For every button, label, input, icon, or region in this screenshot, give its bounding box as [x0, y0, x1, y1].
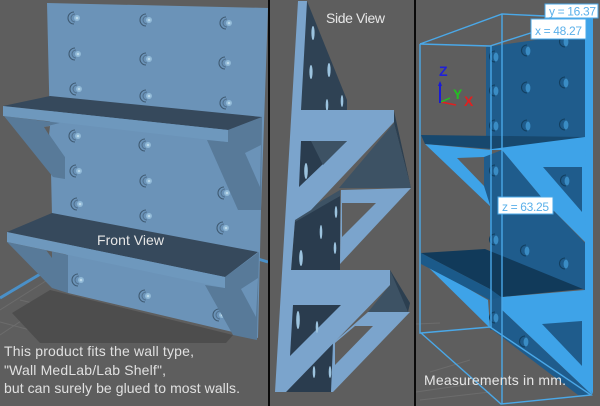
- back wall: [47, 3, 268, 338]
- upper opening: [299, 141, 347, 187]
- main side profile: [275, 1, 394, 392]
- lower left bracket: [7, 242, 68, 293]
- central dark column: [484, 150, 502, 330]
- lower bracket underside: [368, 270, 410, 312]
- floor lines: [416, 323, 500, 400]
- panel dividers: [268, 0, 416, 406]
- dark wall: [486, 33, 585, 137]
- right upright: [585, 17, 593, 395]
- panel: measurements: [416, 4, 598, 404]
- label: side view: Side View: [326, 10, 386, 26]
- upper right bracket: [207, 117, 262, 210]
- floor grid and shadow: [0, 259, 268, 343]
- lower opening: [335, 326, 373, 365]
- rivets: [490, 36, 569, 347]
- lower diagonal wall: [490, 310, 592, 395]
- upper shelf: [3, 96, 262, 142]
- lower shelf: [421, 249, 583, 300]
- middle light strut: [340, 188, 411, 264]
- lower dark wall: [501, 150, 585, 290]
- middle opening: [342, 203, 376, 237]
- dimension label: y: y = 16.37: [549, 4, 596, 18]
- lower strut: [331, 312, 410, 392]
- label: measurements: Measurements in mm.: [424, 372, 566, 388]
- note: wall type: This product fits the wall type,: [4, 343, 194, 359]
- panel: front view: [0, 3, 268, 396]
- dimension label: x: [531, 19, 586, 39]
- lower left bracket: [425, 264, 490, 328]
- axis gizmo: [438, 63, 474, 109]
- rivets: [68, 12, 232, 321]
- upper left bracket: [4, 116, 65, 179]
- axis gizmo: Z: [439, 63, 448, 79]
- note: wall type: [4, 343, 240, 396]
- lower opening in profile: [290, 305, 341, 356]
- label: front view: Front View: [97, 232, 165, 248]
- lower right bracket: [502, 290, 592, 395]
- panel: side view: [275, 1, 411, 392]
- upper shelf: [421, 135, 585, 149]
- dimension label: x: x = 48.27: [535, 24, 582, 38]
- axis gizmo: X: [464, 93, 474, 109]
- axis gizmo: Y: [453, 86, 463, 102]
- upper bracket underside: [339, 111, 411, 188]
- note: wall type: "Wall MedLab/Lab Shelf",: [4, 362, 166, 378]
- note: wall type: but can surely be glued to most walls.: [4, 380, 240, 396]
- lower shelf: [7, 213, 258, 288]
- dimension label: z: z = 63.25: [502, 200, 549, 214]
- upper right bracket: [488, 137, 586, 243]
- dark back wall: [286, 1, 347, 392]
- lower right bracket: [205, 252, 259, 340]
- upper bracket: [425, 144, 492, 207]
- diagonal shadow: [295, 190, 340, 222]
- bounding box: [420, 14, 591, 404]
